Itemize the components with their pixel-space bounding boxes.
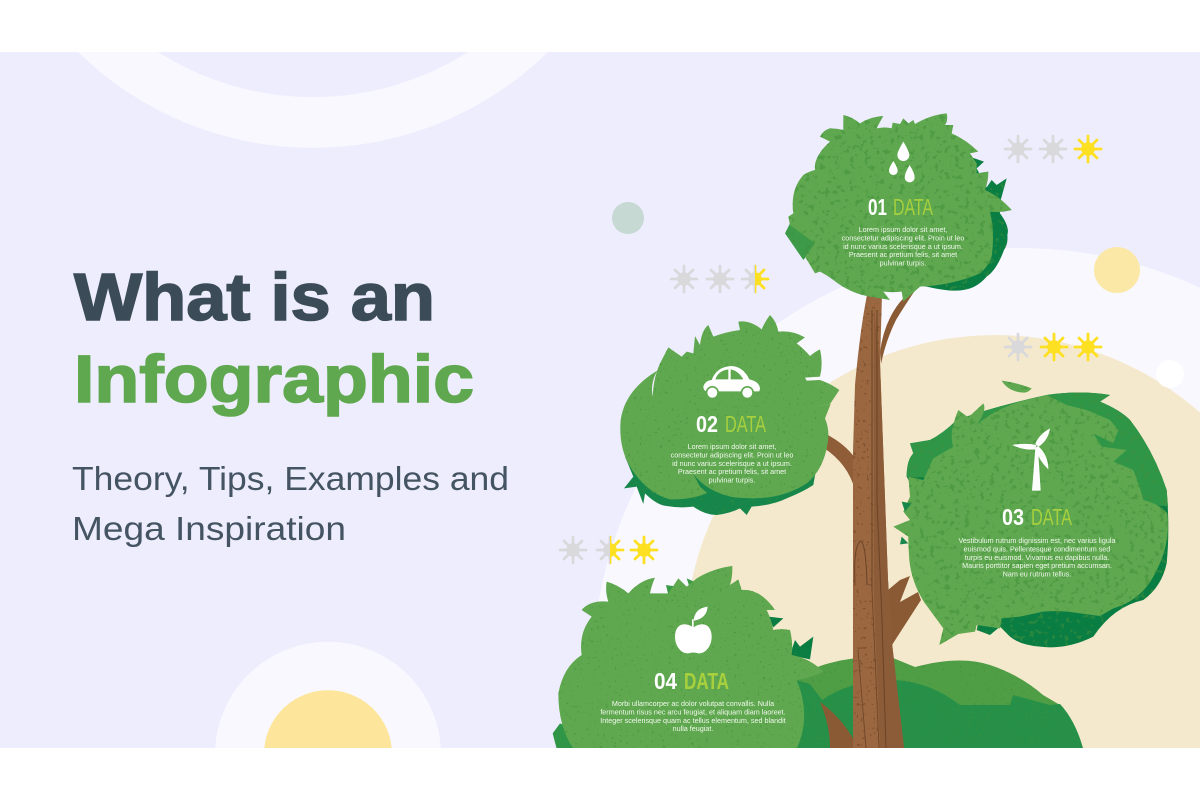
- number: 02 DATA: DATA: [725, 411, 766, 437]
- text block: Praesent ac pretium felis, sit amet: [849, 250, 957, 259]
- foliage: [553, 566, 823, 749]
- icon: car: [703, 366, 760, 399]
- number: 03 DATA: DATA: [1031, 504, 1072, 530]
- crown 3: [893, 381, 1168, 647]
- rating suns: 01: [1005, 136, 1101, 162]
- foliage: [785, 113, 1012, 302]
- title: [74, 260, 474, 417]
- number: 01 DATA: [868, 199, 933, 215]
- text block: Integer scelerisque quam ac tellus elementum, sed blandit: [600, 716, 786, 725]
- text block: [958, 536, 1116, 579]
- text block: Mauris porttitor sapien eget pretium accumsan.: [962, 561, 1112, 570]
- tree trunk and branches: [820, 286, 921, 748]
- foliage: [893, 381, 1168, 647]
- text block: Nam eu rutrum tellus.: [1003, 570, 1071, 579]
- text block: consectetur adipiscing elit. Proin ut leo: [842, 233, 964, 242]
- text block: Lorem ipsum dolor sit amet,: [859, 225, 947, 234]
- branch: to crown 2: [826, 435, 853, 484]
- text block: Lorem ipsum dolor sit amet,: [688, 442, 776, 451]
- small yellow circle: [1094, 247, 1140, 293]
- text block: Vestibulum rutrum dignissim est, nec varius ligula: [958, 536, 1116, 545]
- text block: id nunc varius scelerisque a ut ipsum.: [843, 242, 963, 251]
- large pale circle: [599, 248, 1200, 602]
- icon: wind turbine: [1012, 428, 1050, 491]
- crown 1: [785, 113, 1012, 302]
- subtitle: [72, 460, 509, 547]
- icon: apple: [675, 607, 712, 653]
- text block: nulla feugiat.: [673, 724, 713, 733]
- number: 02 DATA: [696, 416, 766, 432]
- text block: consectetur adipiscing elit. Proin ut leo: [671, 450, 793, 459]
- large beige circle: [685, 335, 1200, 748]
- icon: water drops: [889, 142, 915, 182]
- text block: [600, 699, 786, 733]
- number: 01 DATA: DATA: [893, 194, 933, 220]
- foliage: [620, 315, 839, 515]
- text block: Praesent ac pretium felis, sit amet: [678, 467, 786, 476]
- bottom yellow circle: [264, 690, 392, 748]
- number: 01 DATA: 01: [868, 194, 887, 220]
- trunk: [853, 295, 904, 748]
- subtitle: Mega Inspiration: [72, 510, 346, 547]
- title: What is an: [74, 260, 435, 335]
- number: 02 DATA: 02: [696, 411, 718, 437]
- text block: turpis eu euismod. Vivamus eu dapibus nulla.: [965, 553, 1109, 562]
- subtitle: Theory, Tips, Examples and: [72, 460, 509, 497]
- bottom ring: [215, 642, 441, 748]
- small green circle: [612, 202, 644, 234]
- number: 03 DATA: 03: [1002, 504, 1024, 530]
- crown 2: [620, 315, 839, 515]
- decorative ring: top: [78, 52, 548, 148]
- crown 4: [553, 566, 823, 749]
- rating suns: 02: [671, 266, 768, 292]
- text block: [671, 442, 793, 485]
- number: 04 DATA: 04: [654, 668, 677, 694]
- text block: fermentum risus nec arcu feugiat, et aliquam diam laoreet.: [600, 707, 786, 716]
- branch: to crown 3: [886, 576, 921, 645]
- text block: id nunc varius scelerisque a ut ipsum.: [672, 459, 792, 468]
- branch: lower left: [820, 702, 853, 748]
- text block: [842, 225, 964, 268]
- text block: Morbi ullamcorper ac dolor volutpat convallis. Nulla: [612, 699, 774, 708]
- branch: to crown 1: [880, 292, 914, 364]
- title: Infographic: [74, 342, 474, 417]
- number: 03 DATA: [1002, 509, 1072, 525]
- rating suns: 04: [560, 537, 657, 563]
- text block: euismod quis. Pellentesque condimentum sed: [964, 544, 1110, 553]
- ground bush: [796, 657, 1083, 748]
- rating suns: 03: [1005, 334, 1101, 360]
- number: 04 DATA: [654, 673, 728, 689]
- text block: pulvinar turpis.: [709, 476, 755, 485]
- text block: pulvinar turpis.: [880, 259, 926, 268]
- small white circle: [1158, 382, 1168, 388]
- number: 04 DATA: DATA: [684, 668, 729, 694]
